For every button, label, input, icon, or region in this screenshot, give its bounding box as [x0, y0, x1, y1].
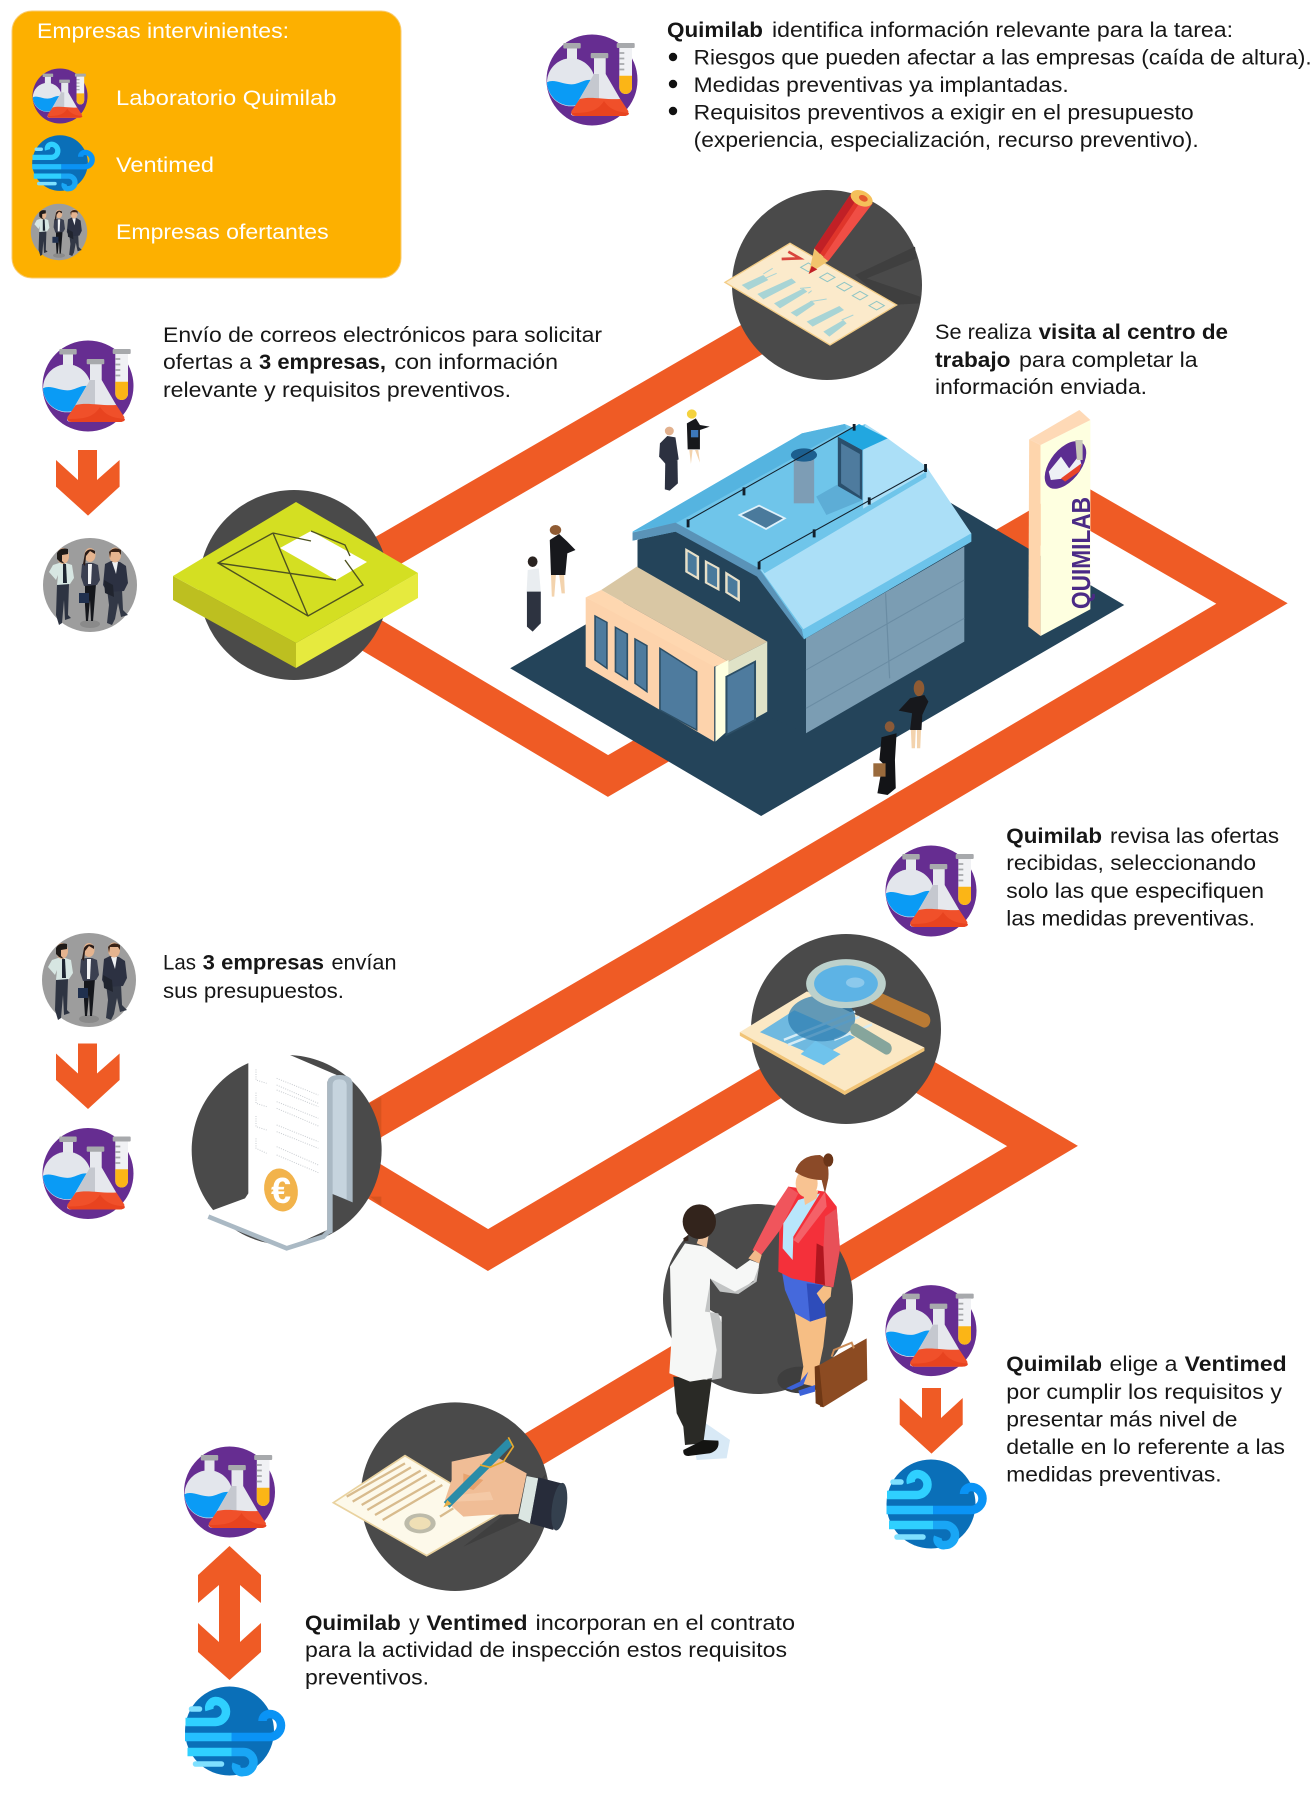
roof railings	[688, 424, 926, 569]
text: Quimilab y Ventimed incorporan: incorporan en el contrato	[536, 1611, 795, 1635]
icon: Quimilab contract	[184, 1446, 275, 1538]
text: Quimilab y Ventimed incorporan: preventivos.	[305, 1666, 429, 1690]
upper windows	[686, 550, 739, 600]
roof	[633, 424, 971, 639]
annex	[586, 567, 767, 742]
text: Quimilab elige a Ventimed: Ventimed	[1185, 1352, 1287, 1376]
icon: magnifier over document circle	[740, 934, 941, 1124]
text: visita al centro de trabajo: visita al centro de	[1039, 320, 1228, 344]
text: Quimilab elige a Ventimed: por cumplir los requisitos y	[1006, 1380, 1282, 1404]
text: las 3 empresas envían: envían	[332, 950, 396, 974]
figures: people left	[527, 525, 575, 632]
text: Quimilab identifica información: Riesgos que pueden afectar a las empresas (caída de altura).	[694, 46, 1312, 70]
text: Quimilab revisa las ofertas: Quimilab	[1006, 824, 1102, 848]
text: Quimilab elige a Ventimed: detalle en lo referente a las	[1006, 1435, 1285, 1459]
icon: envelope on yellow plate circle	[173, 490, 418, 680]
icon: Quimilab step 1	[42, 340, 134, 432]
legend label Quimilab: Laboratorio Quimilab	[116, 86, 337, 110]
figures: people top	[659, 409, 710, 491]
legend label Ventimed: Ventimed	[116, 153, 214, 177]
icon: contract signing circle	[333, 1402, 570, 1591]
text: envío de correos: Envío de correos electrónicos para solicitar	[163, 323, 602, 347]
text: visita al centro de trabajo	[935, 320, 1228, 399]
text: envío de correos: ofertas a	[163, 350, 252, 374]
icon: Ventimed selection	[886, 1460, 982, 1548]
text: Quimilab revisa las ofertas: revisa las ofertas	[1110, 824, 1279, 848]
text: Quimilab identifica información: Medidas preventivas ya implantadas.	[694, 73, 1069, 97]
text: Quimilab revisa las ofertas	[1006, 824, 1279, 930]
text: visita al centro de trabajo: Se realiza	[935, 320, 1032, 344]
icon: companies step 1	[43, 538, 137, 632]
roof vent	[791, 448, 817, 503]
text: las 3 empresas envían: sus presupuestos.	[163, 979, 344, 1003]
text: las 3 empresas envían: Las	[163, 950, 196, 974]
text: envío de correos	[163, 323, 602, 402]
icon: Quimilab step 4	[42, 1128, 134, 1219]
text: Quimilab elige a Ventimed: elige a	[1110, 1352, 1178, 1376]
icon: Quimilab review	[886, 846, 976, 936]
text: Quimilab y Ventimed incorporan: Ventimed	[426, 1611, 528, 1635]
text: Quimilab identifica información: Quimilab	[667, 18, 763, 42]
arrow: down to Ventimed	[900, 1388, 963, 1454]
legend panel: empresas intervinientes	[12, 11, 401, 278]
plot base	[510, 457, 1124, 816]
icon: bidding companies people	[31, 204, 87, 260]
text: visita al centro de trabajo: trabajo	[935, 348, 1010, 372]
icon: budget document with euro coin circle	[192, 1050, 382, 1248]
arrow: down to Quimilab	[56, 1044, 120, 1109]
icon: checklist and pencil circle	[725, 187, 922, 380]
text: Quimilab elige a Ventimed: presentar más nivel de	[1006, 1408, 1238, 1432]
process path: orange route	[286, 296, 1252, 1497]
text: envío de correos: relevante y requisitos preventivos.	[163, 378, 511, 402]
legend title: Empresas intervinientes:	[37, 19, 289, 43]
text: envío de correos: 3 empresas,	[259, 350, 386, 374]
skylight	[739, 506, 785, 529]
icon: companies step 4	[42, 933, 136, 1027]
icon: handshake circle	[663, 1204, 853, 1394]
text: las 3 empresas envían: 3 empresas	[203, 950, 324, 974]
text: las 3 empresas envían	[163, 950, 396, 1003]
building wall dark	[637, 523, 806, 733]
text: visita al centro de trabajo: para completar la	[1019, 348, 1198, 372]
text: visita al centro de trabajo: información enviada.	[935, 375, 1147, 399]
text: Quimilab y Ventimed incorporan: Quimilab	[305, 1611, 401, 1635]
text: Quimilab elige a Ventimed: medidas preventivas.	[1006, 1463, 1222, 1487]
text: envío de correos: con información	[394, 350, 558, 374]
text: Quimilab y Ventimed incorporan: para la actividad de inspección estos requisitos	[305, 1638, 787, 1662]
text: Quimilab revisa las ofertas: solo las que especifiquen	[1006, 879, 1264, 903]
building side wall	[806, 547, 964, 733]
text: Quimilab revisa las ofertas: recibidas, seleccionando	[1006, 851, 1256, 875]
icon: Quimilab flasks	[32, 68, 88, 124]
text: Quimilab identifica información: identifica información relevante para la tarea:	[772, 18, 1233, 42]
text: Quimilab identifica información: (experiencia, especialización, recurso preventivo).	[694, 128, 1199, 152]
icon: Quimilab selection	[886, 1285, 976, 1376]
arrow: down to companies	[56, 450, 120, 516]
text: Quimilab y Ventimed incorporan	[305, 1611, 795, 1690]
illustration: doctor and businesswoman handshake	[669, 1153, 867, 1460]
figures: people front	[873, 680, 928, 795]
text: Quimilab revisa las ofertas: las medidas preventivas.	[1006, 906, 1255, 930]
icon: Ventimed contract	[185, 1686, 281, 1776]
text: Quimilab elige a Ventimed	[1006, 1352, 1287, 1487]
arrow: two-way between Quimilab and Ventimed	[198, 1546, 261, 1680]
icon: Quimilab top	[546, 34, 638, 126]
roof door box	[838, 424, 888, 500]
illustration: company building and plot	[510, 409, 1124, 816]
text: Quimilab identifica información: Requisitos preventivos a exigir en el presupuesto	[694, 101, 1194, 125]
text: Quimilab identifica información	[667, 18, 1312, 152]
icon: budget document with euro coin circle: €	[271, 1170, 291, 1211]
sign text QUIMILAB: QUIMILAB	[1066, 497, 1096, 609]
text: Quimilab elige a Ventimed: Quimilab	[1006, 1352, 1102, 1376]
legend label empresas ofertantes: Empresas ofertantes	[116, 220, 329, 244]
sign pillar	[1028, 410, 1095, 636]
text: Quimilab y Ventimed incorporan: y	[409, 1611, 420, 1635]
icon: Ventimed wind	[32, 135, 92, 191]
